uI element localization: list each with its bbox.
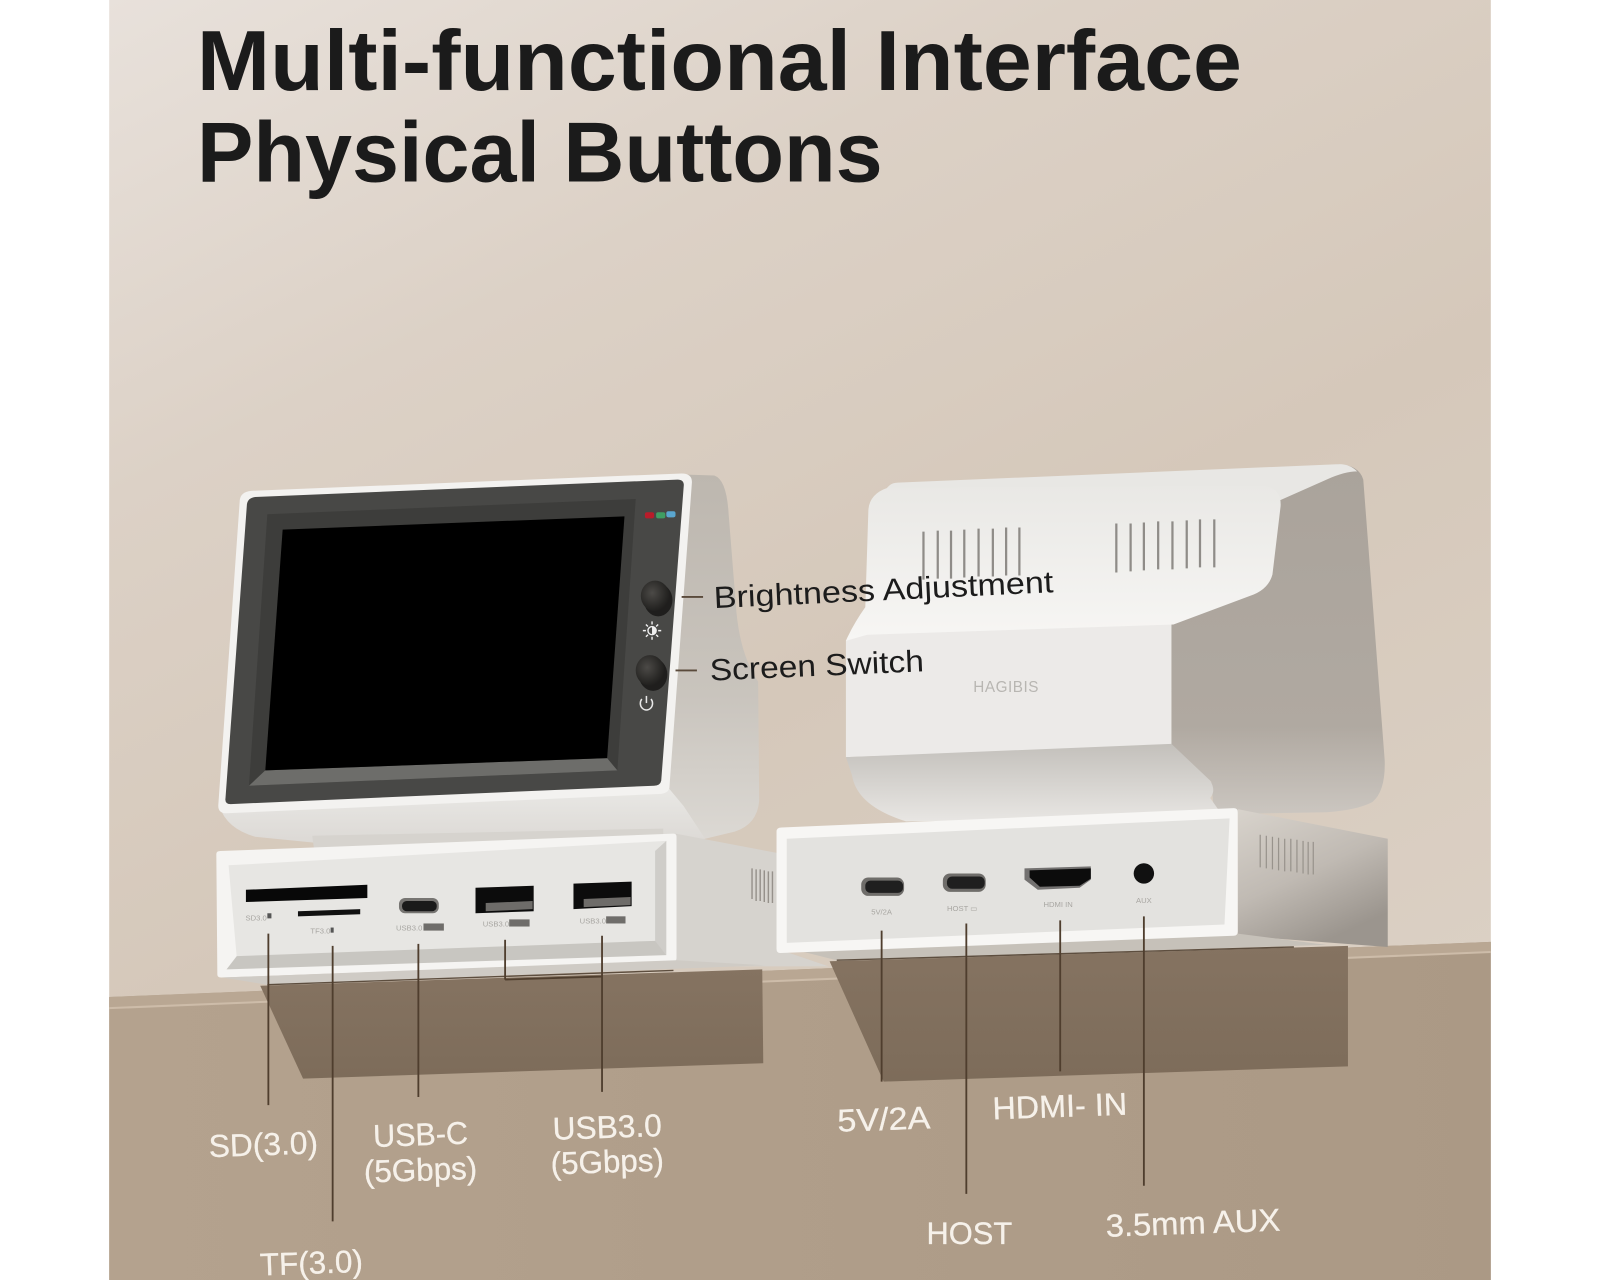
- label: USB-C: USB-C: [372, 1115, 469, 1154]
- icon: brightness sun: [643, 621, 661, 640]
- device shadows on table: [260, 946, 1348, 1082]
- small port markings: [871, 896, 1152, 916]
- right vents: [1116, 519, 1214, 572]
- label: HDMI-IN: HDMI- IN: [992, 1086, 1128, 1126]
- AUX jack: [1134, 863, 1154, 884]
- bezel: [225, 480, 684, 804]
- SD slot: [246, 885, 367, 902]
- stand neck: [312, 829, 663, 851]
- dock side: [1238, 809, 1388, 947]
- monitor rear side body: [408, 474, 759, 842]
- title: Multi-functional Interface: [197, 13, 1242, 109]
- small port markings: [245, 913, 626, 936]
- label: SD: SD(3.0): [208, 1124, 319, 1164]
- TF slot: [298, 909, 360, 916]
- title: Physical Buttons: [197, 105, 883, 201]
- top surface of hood: [868, 464, 1357, 510]
- dock inner face: [787, 818, 1230, 943]
- small port markings: 5V/2A: [871, 907, 893, 916]
- small port markings: TF3.0: [310, 927, 330, 936]
- screen: [265, 516, 624, 770]
- dock bottom lip and contact shadow: [800, 934, 1327, 960]
- right dock base: [777, 808, 1388, 960]
- left dock base: [216, 834, 829, 985]
- brightness knob: [641, 581, 672, 616]
- dock front: [777, 808, 1238, 953]
- label: 3.5mm AUX: 3.5mm AUX: [1105, 1202, 1281, 1244]
- USB-A port 2: [573, 882, 632, 909]
- lower rear panel: [846, 616, 1171, 757]
- label: Brightness Adjustment: Brightness Adjustment: [713, 565, 1055, 615]
- dock side vents: [1260, 835, 1313, 874]
- status LEDs: [645, 511, 676, 518]
- rear shell side: [1171, 464, 1385, 814]
- hood face: [846, 486, 1281, 641]
- bezel recess: [249, 499, 636, 786]
- monitor white frame: [218, 473, 692, 813]
- small port markings: USB3.0: [580, 916, 606, 925]
- USB-C host port: [943, 873, 986, 892]
- USB-C port: [399, 898, 439, 913]
- label: USB3.0: [550, 1107, 664, 1181]
- dock right bevel: [655, 841, 666, 955]
- small port markings: USB3.0: [483, 920, 509, 929]
- dock front: [216, 834, 677, 978]
- small port markings: HOST ▭: [947, 904, 977, 913]
- screen switch knob: [636, 655, 667, 691]
- dock bottom lip and contact shadow: [222, 960, 765, 985]
- title: [197, 13, 1242, 201]
- label: USB3.0: (5Gbps): [550, 1142, 664, 1181]
- right device: rear view: [846, 464, 1385, 821]
- bezel lower bevel: [249, 758, 617, 786]
- dock inner face: [229, 841, 666, 957]
- dock side: [676, 834, 829, 966]
- small port markings: HDMI IN: [1044, 900, 1073, 909]
- dock lower bevel: [227, 941, 666, 969]
- table surface: [109, 942, 1491, 1280]
- label: HOST: HOST: [927, 1215, 1012, 1251]
- dock side vents: [752, 868, 772, 903]
- icon: power: [640, 696, 653, 710]
- leader lines: [268, 597, 1144, 1221]
- small port markings: SD3.0: [245, 913, 267, 922]
- label: Screen Switch: Screen Switch: [709, 644, 925, 688]
- monitor chin: [219, 788, 705, 843]
- USB-C 5V port: [861, 878, 904, 896]
- small port markings: USB3.0: [396, 924, 422, 933]
- label: 5V/2A: 5V/2A: [837, 1099, 932, 1139]
- left device: front view with screen: [218, 473, 759, 851]
- USB-A port 1: [476, 886, 534, 913]
- label: USB-C: (5Gbps): [363, 1150, 478, 1190]
- label: USB-C: [363, 1115, 478, 1190]
- left vents: [923, 528, 1019, 580]
- label: USB3.0: USB3.0: [552, 1107, 662, 1147]
- small port markings: AUX: [1136, 896, 1152, 905]
- HDMI port: [1024, 866, 1091, 890]
- underside strip: [846, 744, 1224, 821]
- brand name: HAGIBIS: [973, 679, 1039, 696]
